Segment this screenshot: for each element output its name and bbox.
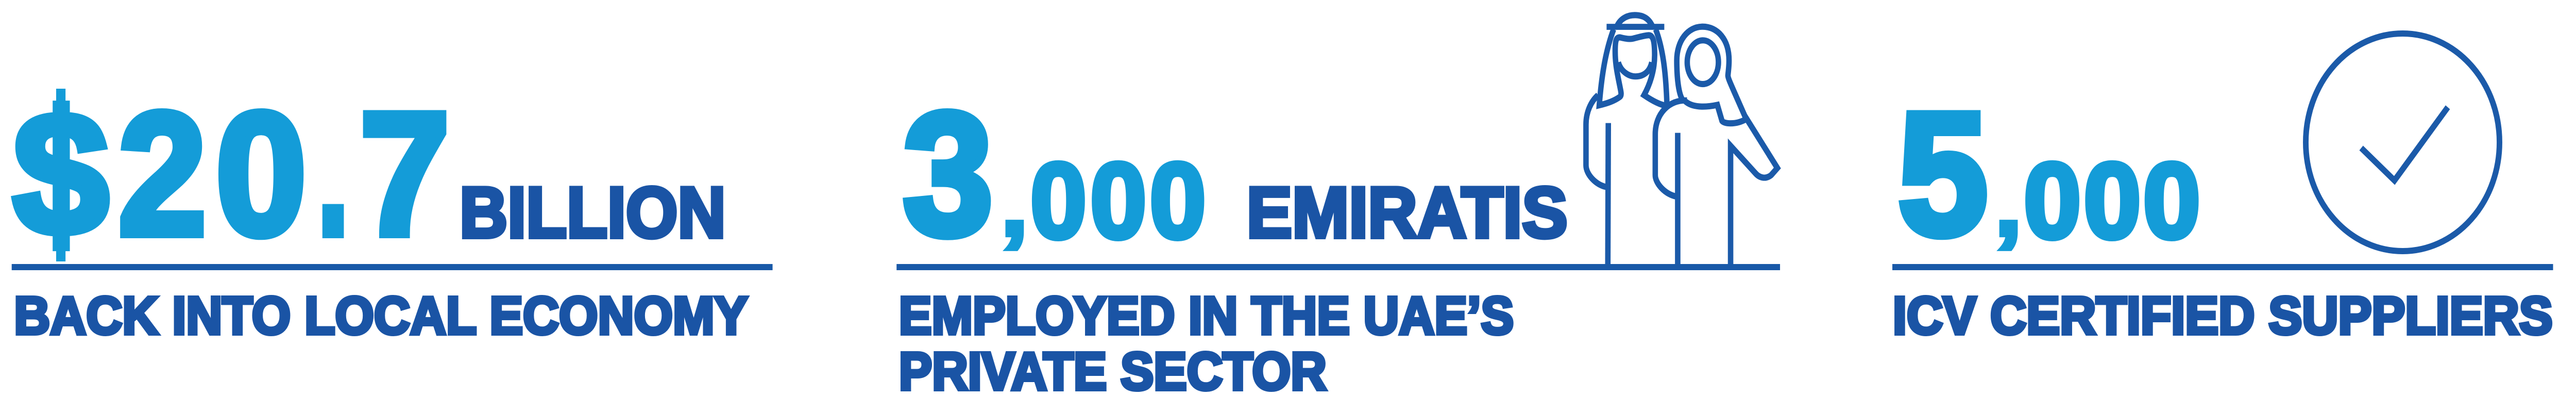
unit: billion: BILLION (460, 173, 726, 253)
man (1586, 15, 1667, 265)
big figure: $20.7: 2 (118, 77, 207, 271)
big figure: 5,000: 0 (2083, 141, 2141, 261)
divider rule (1892, 264, 2553, 270)
panel: local economy (12, 76, 773, 345)
caption: back into local economy: BACK INTO LOCAL ECONOMY (14, 286, 748, 345)
panel: emiratis employed (896, 15, 1780, 401)
big figure: 3,000 (903, 77, 1206, 272)
big figure: 5,000: , (1995, 155, 2022, 254)
big figure: $20.7: $ (13, 76, 108, 271)
big figure: $20.7: 0 (216, 77, 307, 271)
icon: emirati man and woman (1586, 15, 1777, 265)
big figure: 3,000: 3 (903, 77, 993, 272)
big figure: $20.7: 7 (360, 77, 450, 272)
caption: employed in the UAE's private sector: EMPLOYED IN THE UAE’S (899, 286, 1514, 345)
divider rule (12, 264, 773, 270)
divider rule (896, 264, 1780, 270)
icon: check mark in circle (2306, 34, 2499, 251)
woman (1655, 27, 1777, 265)
big figure: 3,000: 0 (1030, 141, 1087, 260)
panel: ICV suppliers (1892, 34, 2553, 345)
big figure: $20.7: . (317, 76, 349, 271)
big figure: 5,000: 0 (2024, 141, 2081, 261)
big figure: 5,000 (1898, 77, 2200, 272)
unit: emiratis: EMIRATIS (1247, 173, 1568, 253)
caption: ICV certified suppliers: ICV CERTIFIED SUPPLIERS (1893, 286, 2553, 345)
big figure: 5,000: 5 (1898, 77, 1988, 272)
caption: employed in the UAE's private sector (899, 286, 1514, 401)
big figure: 3,000: 0 (1149, 141, 1206, 260)
big figure: $20.7 (13, 76, 450, 272)
big figure: 5,000: 0 (2143, 141, 2200, 261)
caption: employed in the UAE's private sector: PRIVATE SECTOR (899, 341, 1327, 401)
big figure: 3,000: , (1001, 155, 1028, 254)
big figure: 3,000: 0 (1090, 141, 1146, 260)
